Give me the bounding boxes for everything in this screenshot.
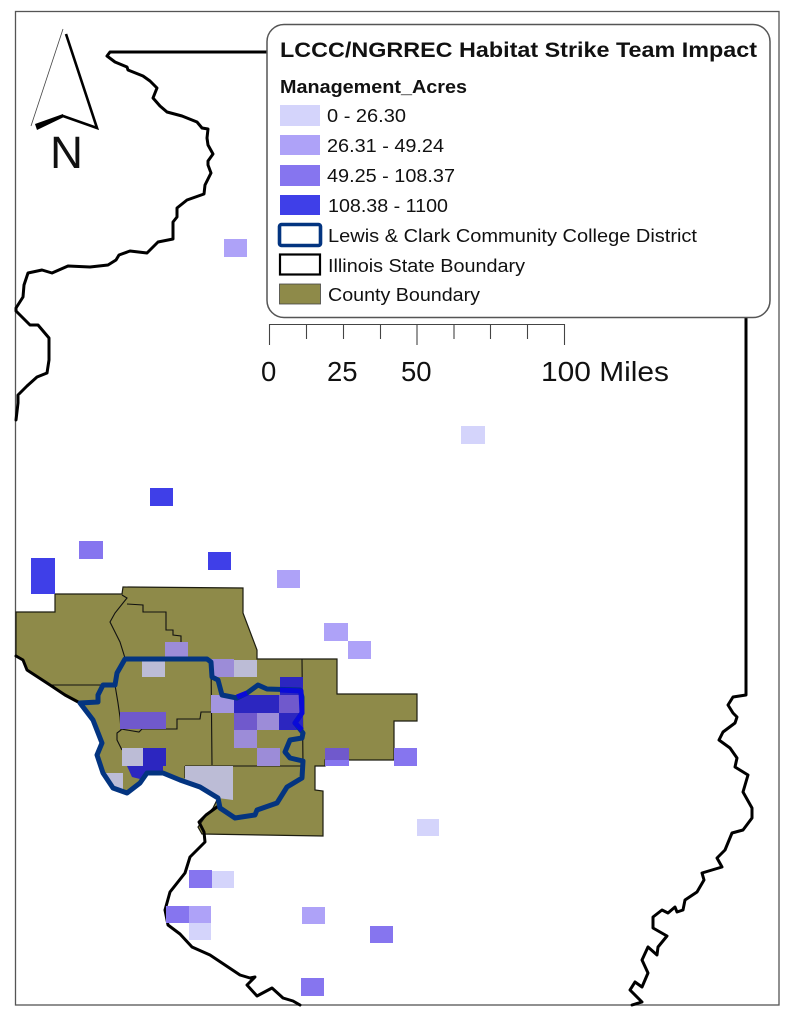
legend item: 108.38 - 1100: 108.38 - 1100 [328, 196, 448, 216]
icon: north arrow [31, 29, 97, 178]
north letter: N [50, 127, 83, 178]
scale labels: 25 [327, 356, 358, 387]
legend box [267, 24, 770, 318]
legend item: 108.38 - 1100 [280, 195, 448, 216]
squares: 26.31 - 49.24 [189, 239, 371, 924]
legend item: 0 - 26.30 [280, 105, 406, 126]
county boundary regions [16, 587, 417, 836]
scale labels: 0 [261, 356, 276, 387]
Lewis and Clark district boundary [80, 659, 303, 818]
legend item: county boundary [280, 284, 480, 305]
northern and northwestern boundary [16, 52, 268, 420]
scale labels: 100 Miles [541, 356, 669, 387]
legend item: 26.31 - 49.24 [280, 135, 444, 156]
scale labels: 50 [401, 356, 432, 387]
legend item: state boundary [280, 254, 525, 276]
legend item: 49.25 - 108.37: 49.25 - 108.37 [327, 166, 455, 186]
squares: 49.25 - 108.37 [79, 541, 417, 996]
squares: 0 - 26.30 [189, 426, 485, 940]
county lines [50, 595, 305, 778]
legend title: LCCC/NGRREC Habitat Strike Team Impact [280, 39, 757, 62]
eastern boundary [630, 318, 752, 1005]
arrow thick side [63, 34, 97, 128]
squares: 108.38 - 1100 [31, 488, 231, 594]
scale bar [261, 324, 669, 387]
county fill [16, 587, 417, 836]
legend item: district: Lewis & Clark Community College District [328, 226, 697, 246]
arrow base shadow [35, 114, 64, 130]
arrow thin side [31, 29, 63, 126]
legend item: 26.31 - 49.24: 26.31 - 49.24 [327, 136, 444, 156]
scale ticks [270, 324, 564, 345]
scale labels [261, 356, 669, 387]
squares over counties [103, 642, 349, 800]
panel: legend [267, 24, 770, 318]
legend item: county boundary: County Boundary [328, 285, 480, 305]
district boundary over dark squares [237, 690, 302, 730]
legend item: 0 - 26.30: 0 - 26.30 [327, 106, 406, 126]
legend subtitle: Management_Acres [280, 77, 467, 97]
management acres squares [31, 239, 485, 996]
legend item: 49.25 - 108.37 [280, 165, 455, 186]
western boundary [16, 656, 80, 703]
southwestern boundary [165, 807, 300, 1005]
legend item: state boundary: Illinois State Boundary [328, 256, 525, 276]
